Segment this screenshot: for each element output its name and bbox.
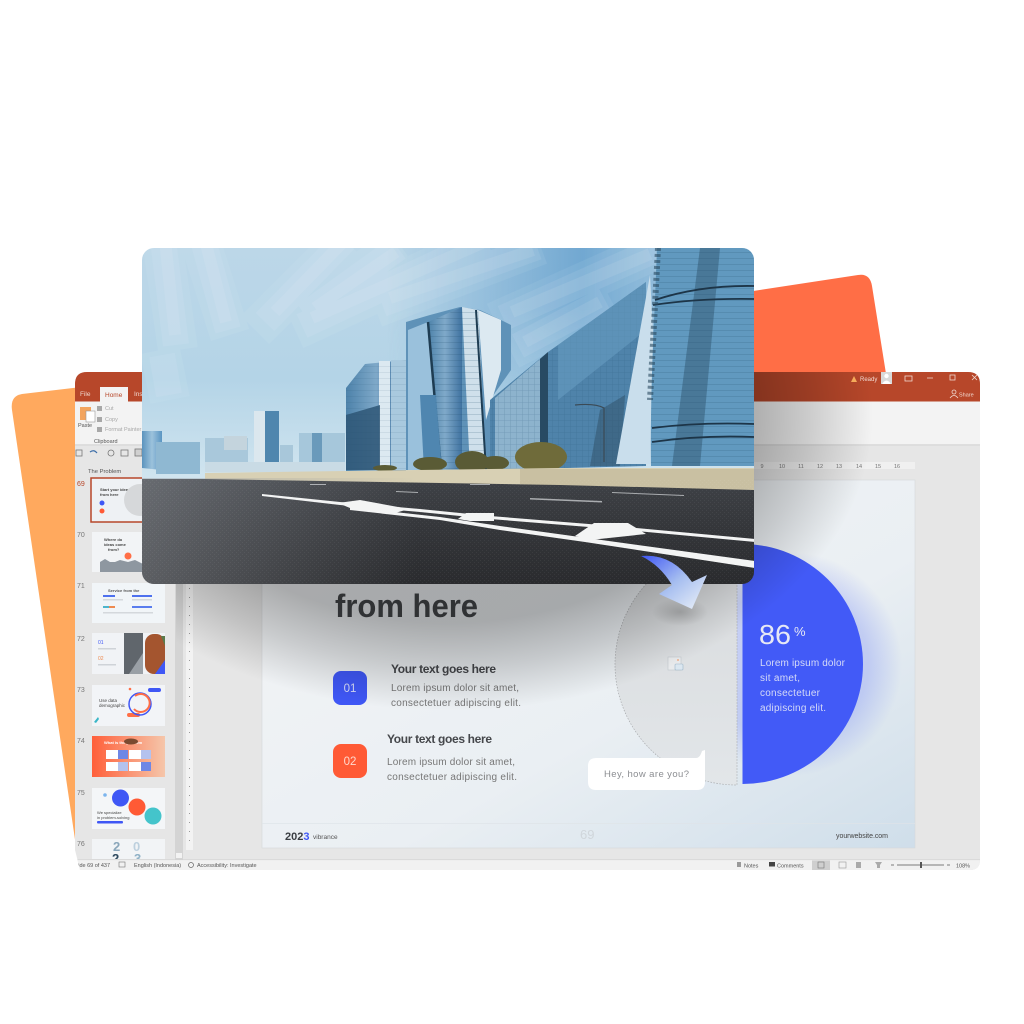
thumbnail 75: We specialize (97, 810, 122, 815)
lane dashes (310, 484, 684, 502)
road marking (262, 494, 755, 568)
clipboard commands: Copy (105, 417, 118, 423)
list item 01: Lorem ipsum dolor sit amet, (391, 683, 519, 694)
list item 02: 02 (344, 756, 356, 768)
slide numbers: 70 (77, 532, 85, 539)
slide numbers: 76 (77, 841, 85, 848)
pie description: Lorem ipsum dolor (760, 658, 846, 669)
road surface (142, 479, 754, 584)
footer logo (285, 831, 338, 843)
list item 01: consectetuer adipiscing elit. (391, 698, 521, 709)
list item 02: consectetuer adipiscing elit. (387, 772, 517, 783)
thumbnail 73: demographic (99, 703, 126, 708)
horizontal ruler: 15 (875, 464, 881, 470)
status icons (119, 860, 950, 870)
percentage value: % (794, 624, 806, 639)
thumbnail 69: from here (100, 492, 119, 497)
horizontal ruler: 9 (760, 464, 764, 470)
thumbnail 72: 01 (98, 640, 104, 646)
cloud streaks (160, 240, 660, 400)
arrow (641, 556, 707, 609)
heading: from here (335, 588, 478, 624)
thumbnail 73 (92, 685, 165, 726)
percentage value (760, 624, 806, 644)
glass wedge (616, 275, 660, 464)
thumbnail 70 (92, 532, 142, 572)
clipboard commands: Cut (105, 406, 114, 412)
horizontal ruler: 11 (798, 464, 804, 470)
slide numbers: 71 (77, 583, 85, 590)
thumbnail scrollbar (175, 584, 183, 860)
distant towers (142, 411, 345, 474)
slide numbers: 73 (77, 687, 85, 694)
user avatar (881, 372, 892, 384)
application window (75, 372, 980, 870)
thumbnail 74 (92, 736, 165, 777)
thumbnail 76: 3 (134, 851, 141, 866)
share button (950, 390, 974, 398)
list item 01 (333, 662, 521, 709)
pie description: sit amet, (760, 673, 800, 684)
paste label: Paste (78, 423, 92, 429)
quick access toolbar (76, 449, 142, 456)
thumbnail 69: Start your idea (100, 487, 129, 492)
image placeholder half (614, 584, 738, 786)
home tab: Home (105, 392, 123, 399)
horizontal ruler: 13 (836, 464, 842, 470)
thumbnail 73: Use data (99, 698, 118, 703)
horizontal ruler (760, 462, 915, 469)
pie description: adipiscing elit. (760, 703, 826, 714)
insert tab: Ins (134, 391, 143, 398)
building: wide glass (490, 282, 646, 470)
trees (373, 442, 567, 473)
horizontal ruler: 10 (779, 464, 785, 470)
percentage value: 86 (759, 619, 791, 650)
list item 02 (333, 732, 517, 783)
status bar: English (Indonesia) (134, 863, 181, 869)
list item 01: Your text goes here (391, 662, 496, 676)
paste icon (80, 407, 95, 422)
list item 02: Your text goes here (387, 732, 492, 746)
thumbnail 76: 0 (133, 839, 140, 854)
clipboard commands: Format Painter (105, 427, 142, 433)
building: left glass (346, 360, 406, 472)
window controls (905, 375, 977, 381)
status bar: lide 69 of 437 (77, 863, 110, 869)
thumbnail panel (77, 478, 166, 866)
slide numbers (77, 481, 85, 848)
clipboard commands (97, 406, 142, 433)
clipboard label: Clipboard (94, 439, 118, 445)
photo: city skyline and road (142, 240, 755, 584)
thumbnail 71 (92, 583, 165, 623)
horizontal ruler: 12 (817, 464, 823, 470)
horizontal ruler: 14 (856, 464, 862, 470)
shadow of photo on window (176, 372, 936, 732)
thumbnail 75: in problem-solving (97, 815, 129, 820)
footer logo: vibrance (313, 834, 338, 841)
thumbnail 75 (92, 788, 165, 829)
roadside wall (205, 468, 754, 490)
status bar: 108% (956, 864, 970, 870)
thumbnail 70: from? (108, 547, 120, 552)
pie description: consectetuer (760, 688, 821, 699)
thumbnail 76 (92, 839, 165, 859)
slide numbers: 74 (77, 738, 85, 745)
building: cylindrical tower (650, 248, 754, 466)
list item 01: 01 (344, 683, 356, 695)
background card: red (740, 275, 887, 380)
speech bubble (588, 750, 705, 790)
footer website: yourwebsite.com (836, 833, 888, 840)
shadow under arrow (652, 598, 708, 626)
vertical ruler (186, 584, 193, 850)
title bar (75, 372, 980, 402)
list item 02: Lorem ipsum dolor sit amet, (387, 757, 515, 768)
speech bubble: Hey, how are you? (604, 769, 689, 780)
slide numbers: 75 (77, 790, 85, 797)
thumbnail 76: 2 (112, 851, 119, 866)
status: ready (851, 376, 877, 383)
thumbnail 72: 02 (98, 656, 104, 662)
thumbnail 72 (92, 633, 165, 674)
sky (142, 248, 754, 488)
horizontal ruler: 16 (894, 464, 900, 470)
slide numbers: 72 (77, 636, 85, 643)
thumbnail 70: Where do (104, 537, 123, 542)
thumbnail 69 (90, 477, 142, 523)
page number: 69 (580, 827, 594, 842)
footer logo: 2023 (285, 831, 309, 843)
background card: orange (12, 386, 90, 860)
status: ready: Ready (860, 377, 877, 383)
file tab: File (80, 391, 91, 398)
pie description (760, 658, 846, 714)
status bar: Comments (777, 864, 804, 870)
glow behind blue pie (737, 560, 894, 766)
ribbon (75, 402, 980, 445)
thumbnail 76: 2 (113, 839, 120, 854)
status bar: Accessibility: Investigate (197, 863, 257, 869)
chart: semi-circle pie (615, 544, 863, 785)
share button: Share (959, 392, 974, 398)
thumbnail 71: Service from the (108, 588, 140, 593)
placeholder icon (668, 657, 683, 670)
thumbnail 74: What is the problem (104, 740, 143, 745)
blue half (742, 544, 863, 784)
status bar: Notes (744, 864, 759, 870)
slide numbers: 69 (77, 481, 85, 488)
status bar (75, 860, 980, 870)
section label: The Problem (88, 469, 121, 475)
home tab (100, 387, 128, 402)
slide (262, 480, 915, 848)
thumbnail 70: ideas come (104, 542, 127, 547)
building: central tower (406, 307, 511, 470)
